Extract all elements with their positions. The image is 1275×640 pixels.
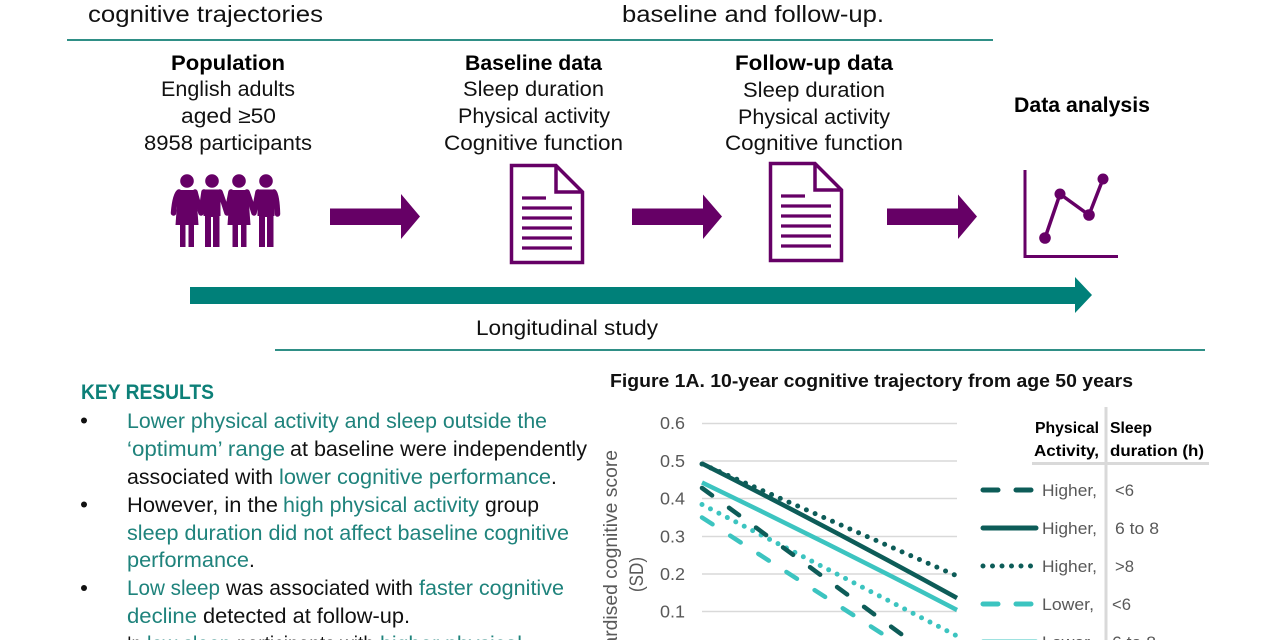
bullet text: physical activity and sleep: Lower physical activity and sleep outside the: [127, 410, 547, 433]
legend row: higher, less than 6: Higher,: [1042, 481, 1097, 500]
bullet text: high activity group: performance: [127, 549, 249, 572]
arrow: baseline to follow-up: [632, 194, 722, 239]
y axis tick labels: [660, 413, 685, 622]
y axis title: (SD): [626, 557, 648, 592]
series: higher activity, 6 to 8h: [702, 464, 957, 598]
text block: population: aged ≥50: [181, 105, 276, 128]
legend row: higher, less than 6: [983, 481, 1134, 500]
legend header: [1034, 420, 1204, 460]
y axis title: [600, 450, 648, 640]
arrow: follow-up to analysis: [887, 194, 977, 239]
text block: follow-up data: Sleep duration: [743, 79, 885, 102]
bullet text: high activity group: [81, 494, 569, 572]
arrow: longitudinal timeline: [190, 277, 1092, 313]
bullet text: low sleep: faster cognitive: [419, 577, 564, 600]
line chart: cognitive trajectory: [600, 413, 957, 640]
bullet text: low sleep: Low sleep: [127, 577, 220, 600]
bullet text: physical activity and sleep: at baseline were independently: [290, 438, 588, 461]
y axis tick labels: 0.1: [660, 602, 685, 622]
bullet text: high activity group: sleep duration did not affect baseline cognitive: [127, 522, 569, 545]
bullet text: physical activity and sleep: ‘optimum’ range: [127, 438, 285, 461]
bullet text: low sleep: decline: [127, 605, 197, 628]
legend row: higher, 6 to 8: [983, 519, 1159, 538]
legend row: lower, less than 6: Lower,: [1042, 595, 1094, 614]
icon: line chart: [1025, 170, 1118, 256]
bullet text: cut off line: [127, 633, 522, 640]
y axis tick labels: 0.3: [660, 526, 685, 546]
y axis tick labels: 0.6: [660, 413, 685, 433]
legend row: higher, greater than 8: >8: [1115, 557, 1134, 576]
text block: population: [144, 52, 312, 155]
legend row: lower, less than 6: <6: [1112, 595, 1131, 614]
bullet text: high activity group: high physical activity: [283, 494, 480, 517]
legend row: higher, 6 to 8: 6 to 8: [1115, 519, 1159, 538]
legend row: lower, less than 6: [983, 595, 1131, 614]
bullet text: low sleep: [81, 577, 564, 628]
label: longitudinal study: Longitudinal study: [476, 317, 659, 340]
text block: baseline data: Sleep duration: [463, 78, 604, 101]
legend header: Sleep: [1110, 420, 1152, 437]
arrow: population to baseline: [330, 194, 420, 239]
series: higher activity, greater than 8h: [702, 464, 957, 576]
legend row: higher, less than 6: <6: [1115, 481, 1134, 500]
bullet text: high activity group: However, in the: [127, 494, 278, 517]
y axis tick labels: 0.4: [660, 488, 685, 508]
series: higher activity, less than 6h: [702, 488, 957, 640]
text block: baseline data: Baseline data: [465, 52, 602, 75]
icon: group of people: [174, 174, 278, 247]
legend row: higher, 6 to 8: Higher,: [1042, 519, 1097, 538]
legend header: Activity,: [1034, 443, 1099, 460]
legend row: higher, greater than 8: Higher,: [1042, 557, 1097, 576]
icon: follow-up document: [770, 164, 842, 260]
chart title: Figure 1A. 10-year cognitive trajectory from age 50 years: [610, 371, 1133, 391]
text block: population: Population: [171, 52, 285, 75]
text block: baseline data: Physical activity: [458, 105, 611, 128]
bullet text: high activity group: group: [485, 494, 539, 517]
y axis tick labels: 0.2: [660, 564, 685, 584]
text block: baseline data: Cognitive function: [444, 132, 623, 155]
series: lower activity, greater than 8h: [702, 504, 957, 636]
heading: right column fragment: baseline and follow-up.: [622, 1, 884, 27]
bullet text: physical activity and sleep: .: [551, 466, 557, 489]
legend row: higher, greater than 8: [983, 557, 1134, 576]
text block: follow-up data: Cognitive function: [725, 132, 903, 155]
text block: follow-up data: Physical activity: [738, 106, 891, 129]
bullet text: low sleep: detected at follow-up.: [203, 605, 410, 628]
bullet text: physical activity and sleep: lower cognitive performance: [279, 466, 551, 489]
text block: baseline data: [444, 52, 623, 155]
y axis tick labels: 0.5: [660, 451, 685, 471]
bullet text: low sleep: was associated with: [225, 577, 413, 600]
legend row: lower, 6 to 8: [983, 633, 1156, 640]
bullet text: high activity group: .: [249, 549, 255, 572]
bullet text: physical activity and sleep: associated with: [127, 466, 273, 489]
icon: baseline document: [512, 166, 582, 262]
legend header: duration (h): [1110, 443, 1204, 460]
text block: data analysis: Data analysis: [1014, 94, 1150, 117]
legend: [983, 407, 1209, 640]
heading: key results: KEY RESULTS: [81, 381, 214, 404]
panel: key results: [81, 381, 588, 640]
series: lower activity, less than 6h: [702, 518, 957, 640]
text block: follow-up data: [725, 52, 903, 155]
bullet text: physical activity and sleep: [81, 410, 588, 489]
series: lower activity, 6 to 8h: [702, 482, 957, 610]
text block: population: 8958 participants: [144, 132, 312, 155]
text block: population: English adults: [161, 78, 295, 101]
heading: left column fragment: cognitive trajectories: [88, 1, 323, 27]
text block: follow-up data: Follow-up data: [735, 52, 893, 75]
legend header: Physical: [1035, 420, 1099, 437]
